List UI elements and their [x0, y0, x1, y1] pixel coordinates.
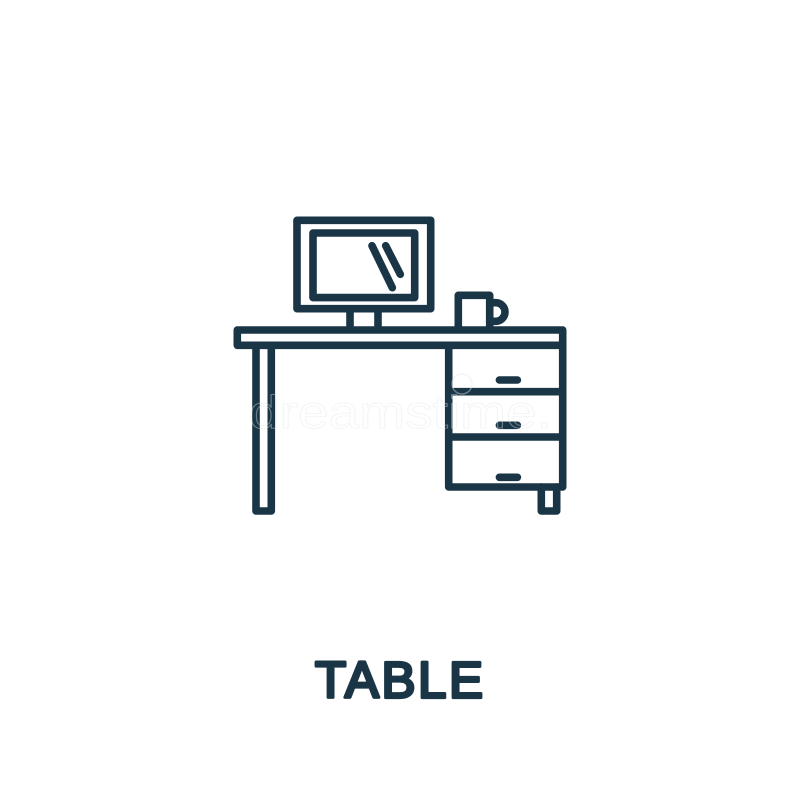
icon: desk with monitor, mug and drawers	[237, 220, 563, 511]
watermark: dreamstime.	[249, 386, 552, 438]
watermark	[249, 374, 552, 438]
coffee mug	[458, 295, 505, 328]
monitor	[297, 220, 431, 328]
title: TABLE	[315, 652, 483, 708]
left leg	[256, 345, 271, 511]
drawer cabinet	[449, 345, 563, 487]
table top	[237, 330, 563, 345]
right foot	[541, 487, 557, 511]
